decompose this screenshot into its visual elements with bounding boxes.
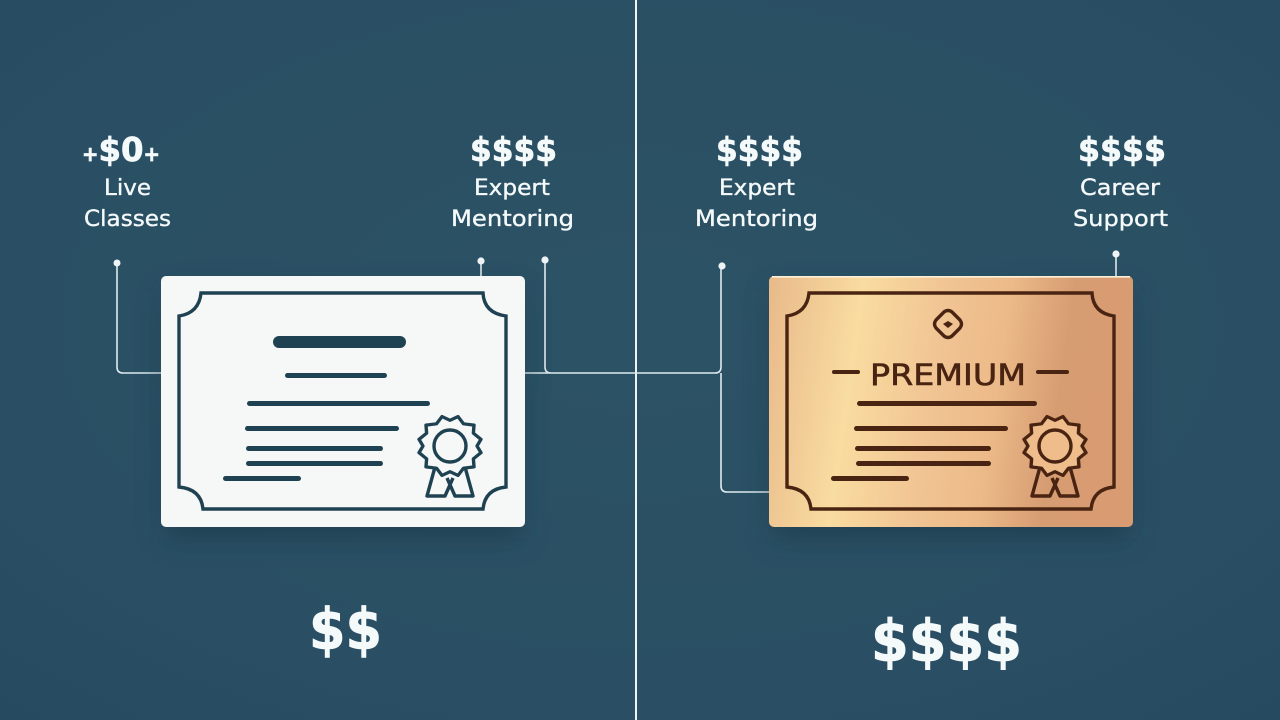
feature label: expert mentoring left: Mentoring (451, 207, 574, 232)
top highlight (772, 276, 1130, 278)
connector: career support (1112, 250, 1120, 277)
right card: premium certificate (769, 276, 1133, 538)
text lines (223, 336, 430, 481)
feature label: live classes: Classes (84, 207, 171, 232)
price: premium: $$$$ (871, 607, 1022, 675)
feature label: expert mentoring left (451, 130, 574, 232)
connector: bridge between cards (525, 256, 726, 373)
premium heading: PREMIUM (870, 358, 1026, 392)
feature label: expert mentoring right (695, 130, 818, 232)
feature label: expert mentoring left: $$$$ (470, 130, 557, 169)
left card: standard certificate (161, 276, 525, 538)
feature label: expert mentoring right: Expert (719, 176, 795, 201)
feature label: expert mentoring left: Expert (474, 176, 550, 201)
feature label: career support: $$$$ (1078, 130, 1166, 169)
feature label: live classes: Live (104, 176, 151, 201)
price: standard: $$ (309, 597, 382, 663)
feature label: expert mentoring right: $$$$ (716, 130, 803, 169)
feature label: expert mentoring right: Mentoring (695, 207, 818, 232)
feature label: career support: Support (1073, 207, 1168, 232)
connector: expert mentoring left (477, 257, 485, 277)
gold plate (769, 276, 1133, 527)
connector lines (114, 250, 1120, 492)
ornate border (179, 293, 506, 509)
feature label: career support: Career (1080, 176, 1161, 201)
feature label: live classes: +$0+ (82, 130, 160, 169)
feature label: live classes (82, 130, 171, 232)
center divider (635, 0, 637, 720)
heading rules and text lines (831, 370, 1069, 481)
certificate paper (161, 276, 525, 527)
feature label: career support (1073, 130, 1168, 232)
connector: live classes (114, 260, 162, 373)
connector: to premium card (721, 373, 770, 492)
ornate border (787, 293, 1114, 509)
icon: award seal (1024, 417, 1086, 496)
icon: award seal (419, 417, 481, 496)
icon: diamond emblem (934, 310, 962, 338)
